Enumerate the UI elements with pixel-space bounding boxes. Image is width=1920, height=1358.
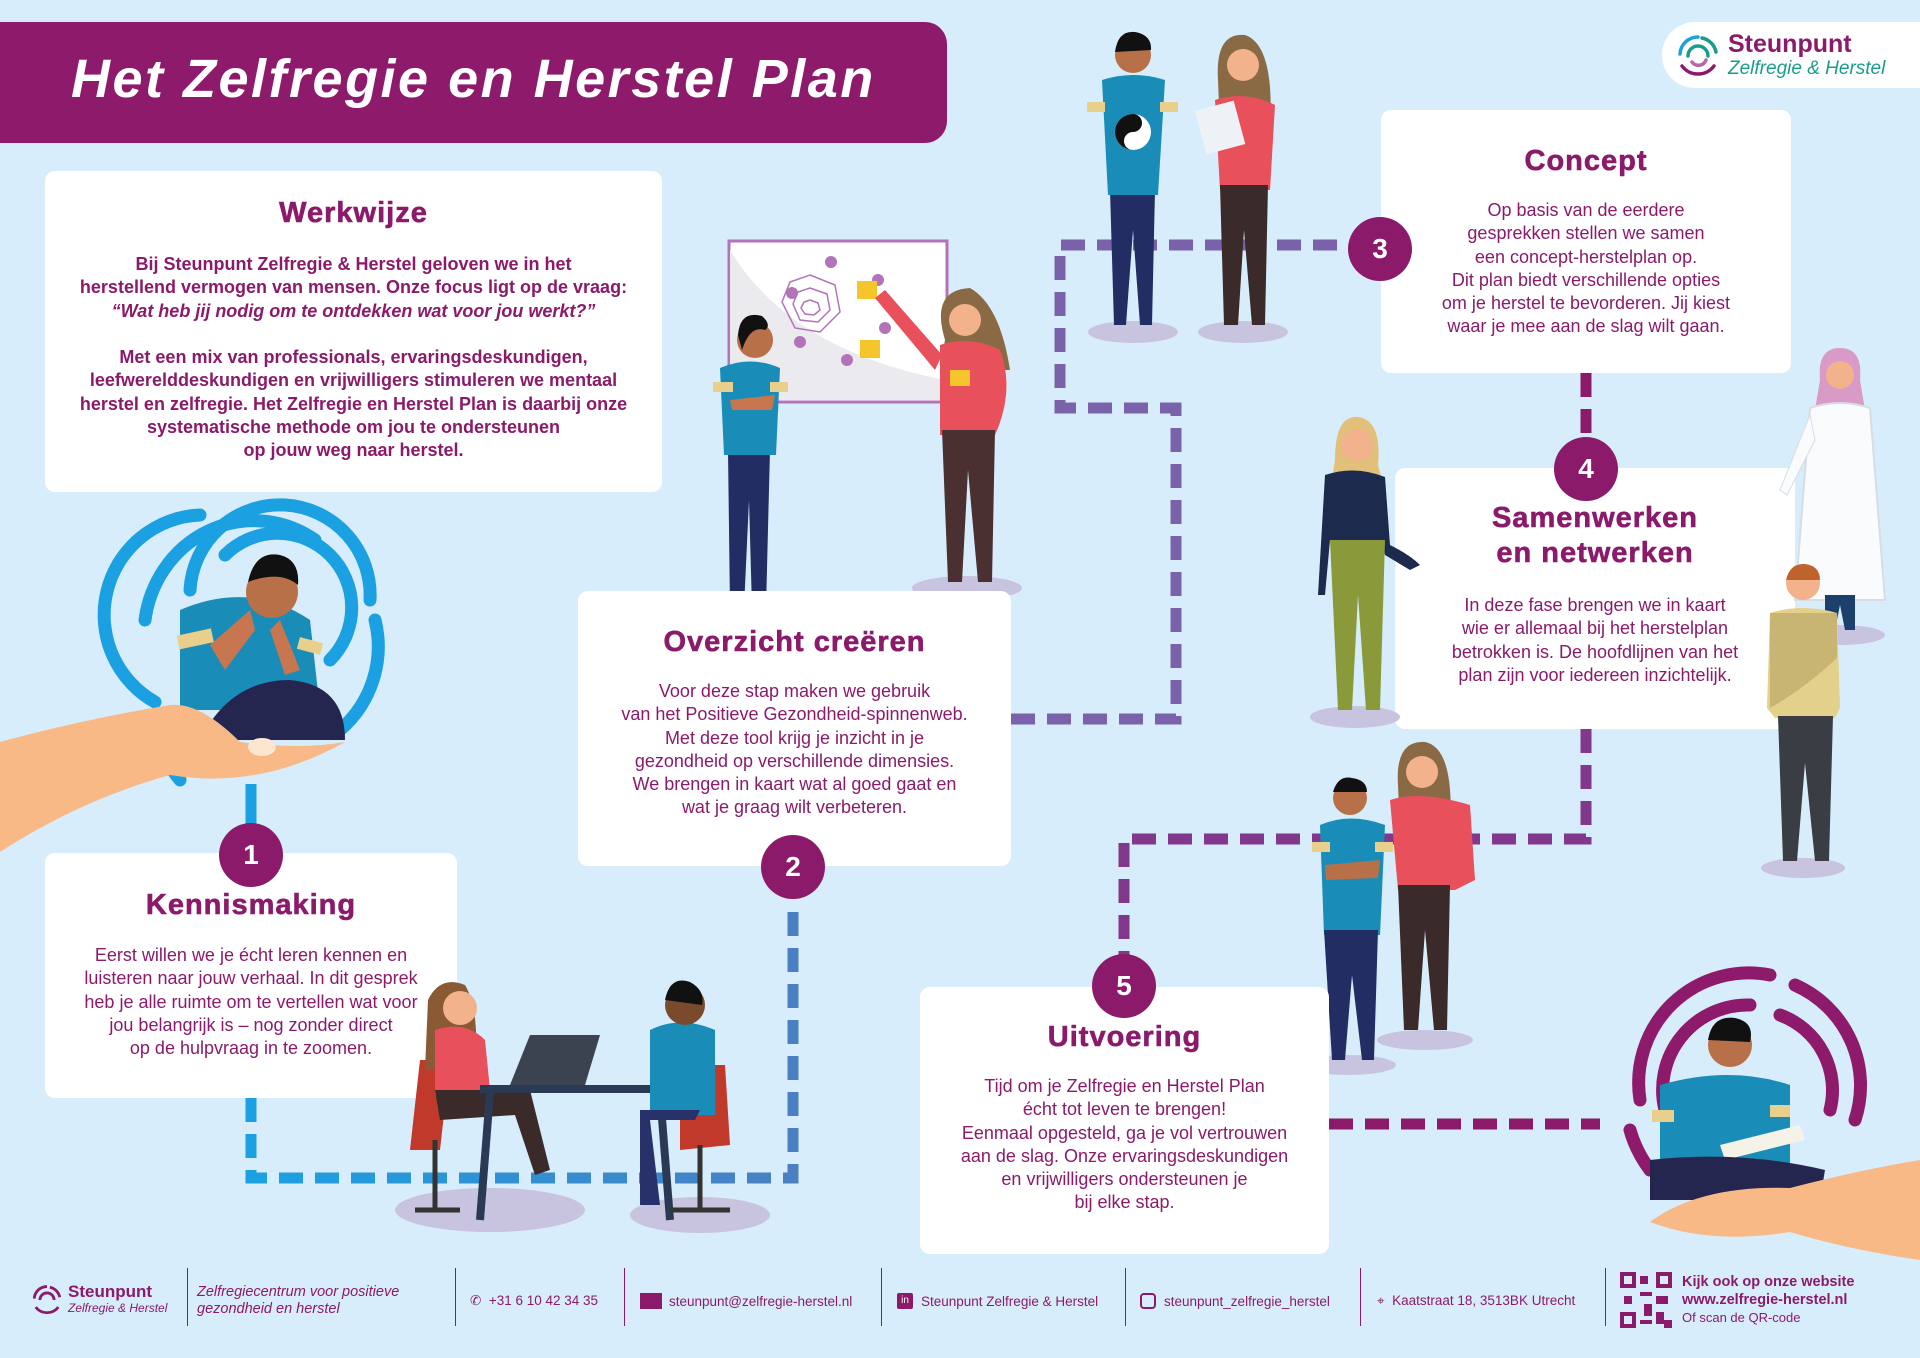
panel: werkwijze: leefwerelddeskundigen en vrijwilligers stimuleren we mentaal <box>90 370 617 390</box>
panel: overzicht creeren: Overzicht creëren <box>663 626 926 658</box>
illustration: person writing in magenta spiral on hand <box>1624 966 1920 1260</box>
panel: overzicht creeren: Met deze tool krijg je inzicht in je <box>665 728 924 748</box>
footer qr and website: Of scan de QR-code <box>1682 1310 1800 1325</box>
panel: kennismaking: Eerst willen we je écht leren kennen en <box>95 945 407 965</box>
footer instagram: steunpunt_zelfregie_herstel <box>1164 1294 1330 1308</box>
footer phone: ✆ +31 6 10 42 34 35 <box>470 1293 598 1308</box>
illustration: desk conversation <box>395 980 770 1233</box>
panel: kennismaking: jou belangrijk is – nog zonder direct <box>109 1015 393 1035</box>
footer tagline <box>196 1284 399 1317</box>
panel: uitvoering: écht tot leven te brengen! <box>1023 1099 1226 1119</box>
panel: werkwijze <box>45 171 662 492</box>
panel: kennismaking: Kennismaking <box>146 889 356 921</box>
illustration: person in spiral on hand <box>0 498 385 852</box>
panel: concept: Dit plan biedt verschillende opties <box>1452 270 1720 290</box>
step 5 number <box>1092 954 1156 1018</box>
footer linkedin: Steunpunt Zelfregie & Herstel <box>921 1294 1098 1308</box>
title banner <box>0 22 947 143</box>
step 1 number: 1 <box>243 839 259 870</box>
panel: werkwijze: “Wat heb jij nodig om te ontdekken wat voor jou werkt?” <box>112 301 595 321</box>
panel: overzicht creeren <box>578 591 1011 866</box>
panel: werkwijze: herstellend vermogen van mensen. Onze focus ligt op de vraag: <box>80 277 627 297</box>
step 3 number: 3 <box>1372 233 1388 264</box>
panel: uitvoering: aan de slag. Onze ervaringsdeskundigen <box>961 1146 1288 1166</box>
footer linkedin: in <box>901 1295 909 1306</box>
step 3 number <box>1348 217 1412 281</box>
title banner: Het Zelfregie en Herstel Plan <box>71 49 876 109</box>
step 1 number <box>219 823 283 887</box>
panel: concept: waar je mee aan de slag wilt gaan. <box>1447 316 1725 336</box>
panel: kennismaking: luisteren naar jouw verhaal. In dit gesprek <box>84 968 418 988</box>
panel: concept: om je herstel te bevorderen. Jij kiest <box>1442 293 1730 313</box>
panel: kennismaking: op de hulpvraag in te zoomen. <box>130 1038 372 1058</box>
logo top right: Steunpunt <box>1728 30 1852 58</box>
step 2 number: 2 <box>785 851 801 882</box>
panel: samenwerken: wie er allemaal bij het herstelplan <box>1462 618 1728 638</box>
footer qr and website <box>1620 1272 1854 1328</box>
panel: samenwerken: en netwerken <box>1496 537 1694 569</box>
panel: werkwijze: Werkwijze <box>279 197 428 229</box>
panel: concept: Concept <box>1524 145 1648 177</box>
panel: samenwerken <box>1395 468 1795 729</box>
footer logo <box>32 1282 168 1315</box>
panel: kennismaking: heb je alle ruimte om te vertellen wat voor <box>84 992 418 1012</box>
panel: samenwerken: betrokken is. De hoofdlijnen van het <box>1452 642 1738 662</box>
panel: werkwijze: systematische methode om jou te ondersteunen <box>147 417 560 437</box>
panel: werkwijze: herstel en zelfregie. Het Zelfregie en Herstel Plan is daarbij onze <box>80 394 627 414</box>
panel: concept <box>1381 110 1791 373</box>
panel: werkwijze: Bij Steunpunt Zelfregie & Herstel geloven we in het <box>135 254 572 274</box>
panel: werkwijze: op jouw weg naar herstel. <box>243 440 464 460</box>
panel: werkwijze: Met een mix van professionals, ervaringsdeskundigen, <box>119 347 588 367</box>
illustration: two people top <box>1087 32 1288 343</box>
footer logo: Zelfregie & Herstel <box>68 1301 167 1315</box>
illustration: woman green pants <box>1310 416 1420 728</box>
panel: uitvoering <box>920 987 1329 1254</box>
step 4 number: 4 <box>1578 453 1594 484</box>
footer tagline: gezondheid en herstel <box>197 1301 340 1317</box>
step 2 number <box>761 835 825 899</box>
footer tagline: Zelfregiecentrum voor positieve <box>197 1284 399 1300</box>
panel: overzicht creeren: We brengen in kaart wat al goed gaat en <box>633 774 956 794</box>
illustration: man yellow shirt <box>1761 564 1845 878</box>
panel: uitvoering: bij elke stap. <box>1074 1192 1175 1212</box>
panel: overzicht creeren: wat je graag wilt verbeteren. <box>682 797 907 817</box>
panel: uitvoering: Tijd om je Zelfregie en Herstel Plan <box>984 1076 1265 1096</box>
panel: kennismaking <box>45 853 457 1098</box>
footer logo: Steunpunt <box>68 1282 152 1301</box>
panel: samenwerken: In deze fase brengen we in kaart <box>1464 595 1726 615</box>
footer qr and website: Kijk ook op onze website <box>1682 1274 1854 1290</box>
panel: uitvoering: Eenmaal opgesteld, ga je vol vertrouwen <box>962 1123 1287 1143</box>
panel: overzicht creeren: van het Positieve Gezondheid-spinnenweb. <box>621 704 968 724</box>
footer qr and website: www.zelfregie-herstel.nl <box>1682 1292 1847 1308</box>
illustration: whiteboard <box>713 240 1022 596</box>
footer address: ⌖ Kaatstraat 18, 3513BK Utrecht <box>1377 1293 1575 1308</box>
logo top right: Zelfregie & Herstel <box>1728 58 1885 79</box>
step 4 number <box>1554 437 1618 501</box>
panel: concept: gesprekken stellen we samen <box>1467 223 1705 243</box>
footer email: steunpunt@zelfregie-herstel.nl <box>669 1294 852 1308</box>
panel: concept: een concept-herstelplan op. <box>1475 247 1697 267</box>
panel: concept: Op basis van de eerdere <box>1487 200 1685 220</box>
illustration: doctor <box>1780 348 1886 645</box>
panel: overzicht creeren: gezondheid op verschillende dimensies. <box>635 751 954 771</box>
panel: uitvoering: Uitvoering <box>1048 1021 1201 1053</box>
panel: overzicht creeren: Voor deze stap maken we gebruik <box>659 681 930 701</box>
panel: uitvoering: en vrijwilligers ondersteunen je <box>1001 1169 1248 1189</box>
logo top right <box>1662 22 1920 88</box>
step 5 number: 5 <box>1116 970 1132 1001</box>
panel: samenwerken: Samenwerken <box>1492 502 1698 534</box>
panel: samenwerken: plan zijn voor iedereen inzichtelijk. <box>1458 665 1732 685</box>
illustration: couple <box>1312 742 1475 1075</box>
